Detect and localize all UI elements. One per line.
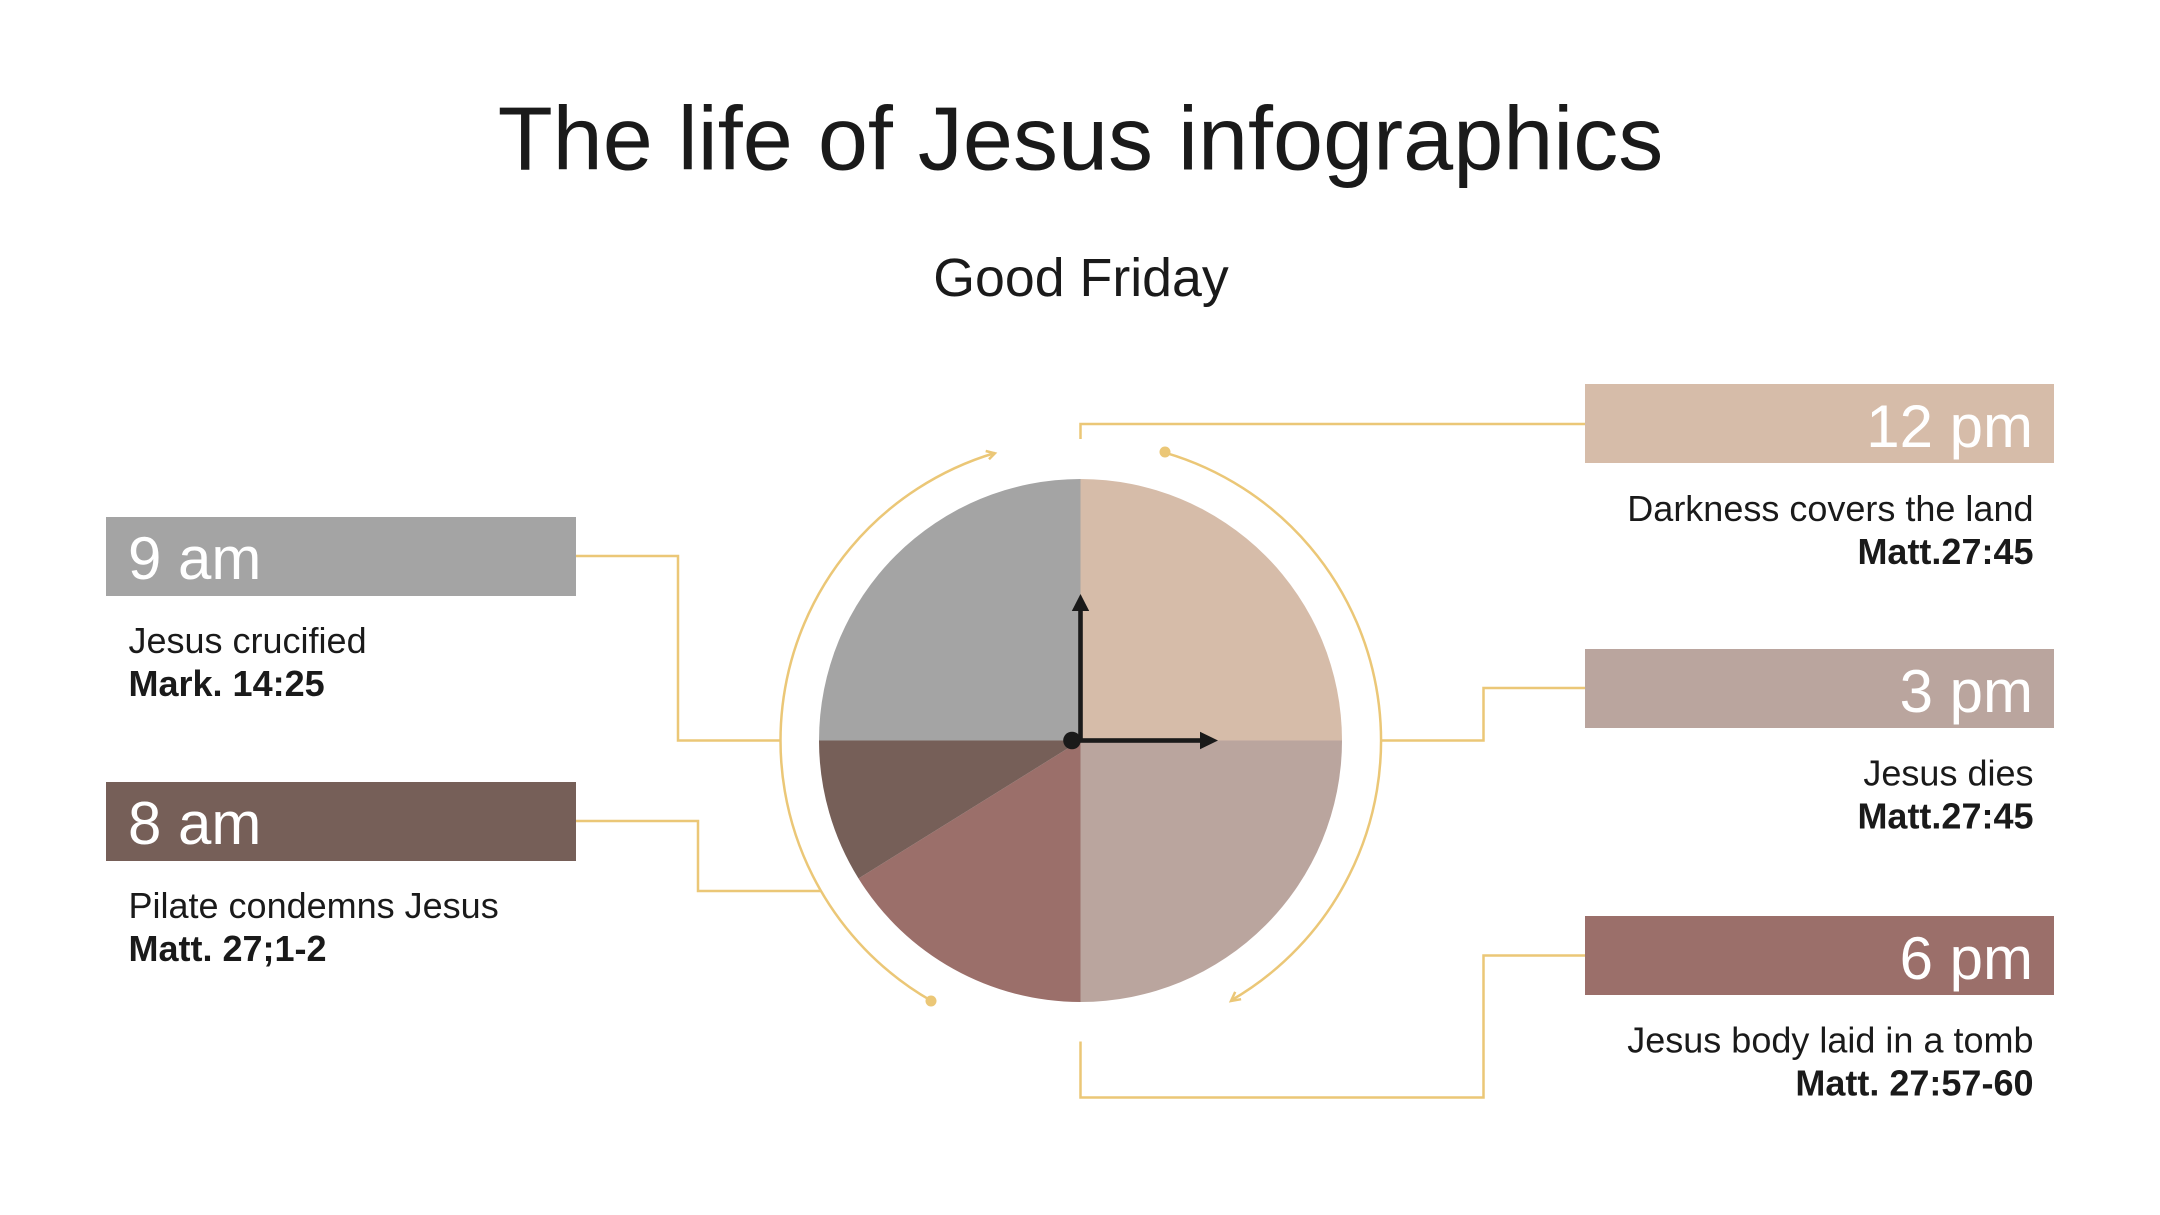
connector: 3 pm [1381,688,1585,740]
slice: 6 pm sector [858,740,1080,1002]
panel: 9 am [106,517,576,704]
time bar [106,517,576,596]
arc: left clockwise arrow [781,451,995,1006]
description: Darkness covers the land [1627,488,2034,529]
pie clock [819,479,1342,1002]
connector: 6 pm [1080,956,1585,1098]
time bar [1585,384,2054,463]
hand: horizontal arrow [1072,732,1218,749]
panel: 12 pm [1585,384,2054,572]
time bar [1585,916,2054,995]
time bar [106,782,576,861]
panel: 3 pm [1585,649,2054,836]
panel: 6 pm [1585,916,2054,1104]
description: Pilate condemns Jesus [128,885,499,926]
description: Jesus dies [1863,752,2034,794]
subtitle: Good Friday [933,248,1229,308]
time label: 8 am [128,790,261,857]
panel: 8 am [106,782,576,969]
description: Jesus crucified [128,620,367,661]
time bar [1585,649,2054,728]
connector: 12 pm [1080,424,1585,439]
time label: 9 am [128,525,261,592]
time label: 6 pm [1900,925,2033,992]
slice: 8 am sector [819,740,1080,878]
reference: Matt. 27;1-2 [128,928,327,969]
reference: Mark. 14:25 [128,663,325,704]
reference: Matt.27:45 [1857,531,2034,572]
connector: 8 am [576,821,820,891]
clock pivot [1063,732,1081,749]
time label: 12 pm [1866,393,2033,460]
clock hands [1063,594,1218,749]
reference: Matt. 27:57-60 [1795,1062,2034,1104]
description: Jesus body laid in a tomb [1627,1020,2034,1060]
slice: 9 am quadrant [819,479,1080,740]
hand: vertical arrow [1072,594,1089,742]
connector: 9 am [576,556,780,740]
time label: 3 pm [1900,658,2033,725]
slice: 3 pm quadrant [1080,740,1342,1002]
reference: Matt.27:45 [1857,796,2034,836]
title: The life of Jesus infographics [498,90,1663,190]
arc: right clockwise arrow [1160,446,1381,1001]
slice: 12 pm quadrant [1080,479,1342,740]
